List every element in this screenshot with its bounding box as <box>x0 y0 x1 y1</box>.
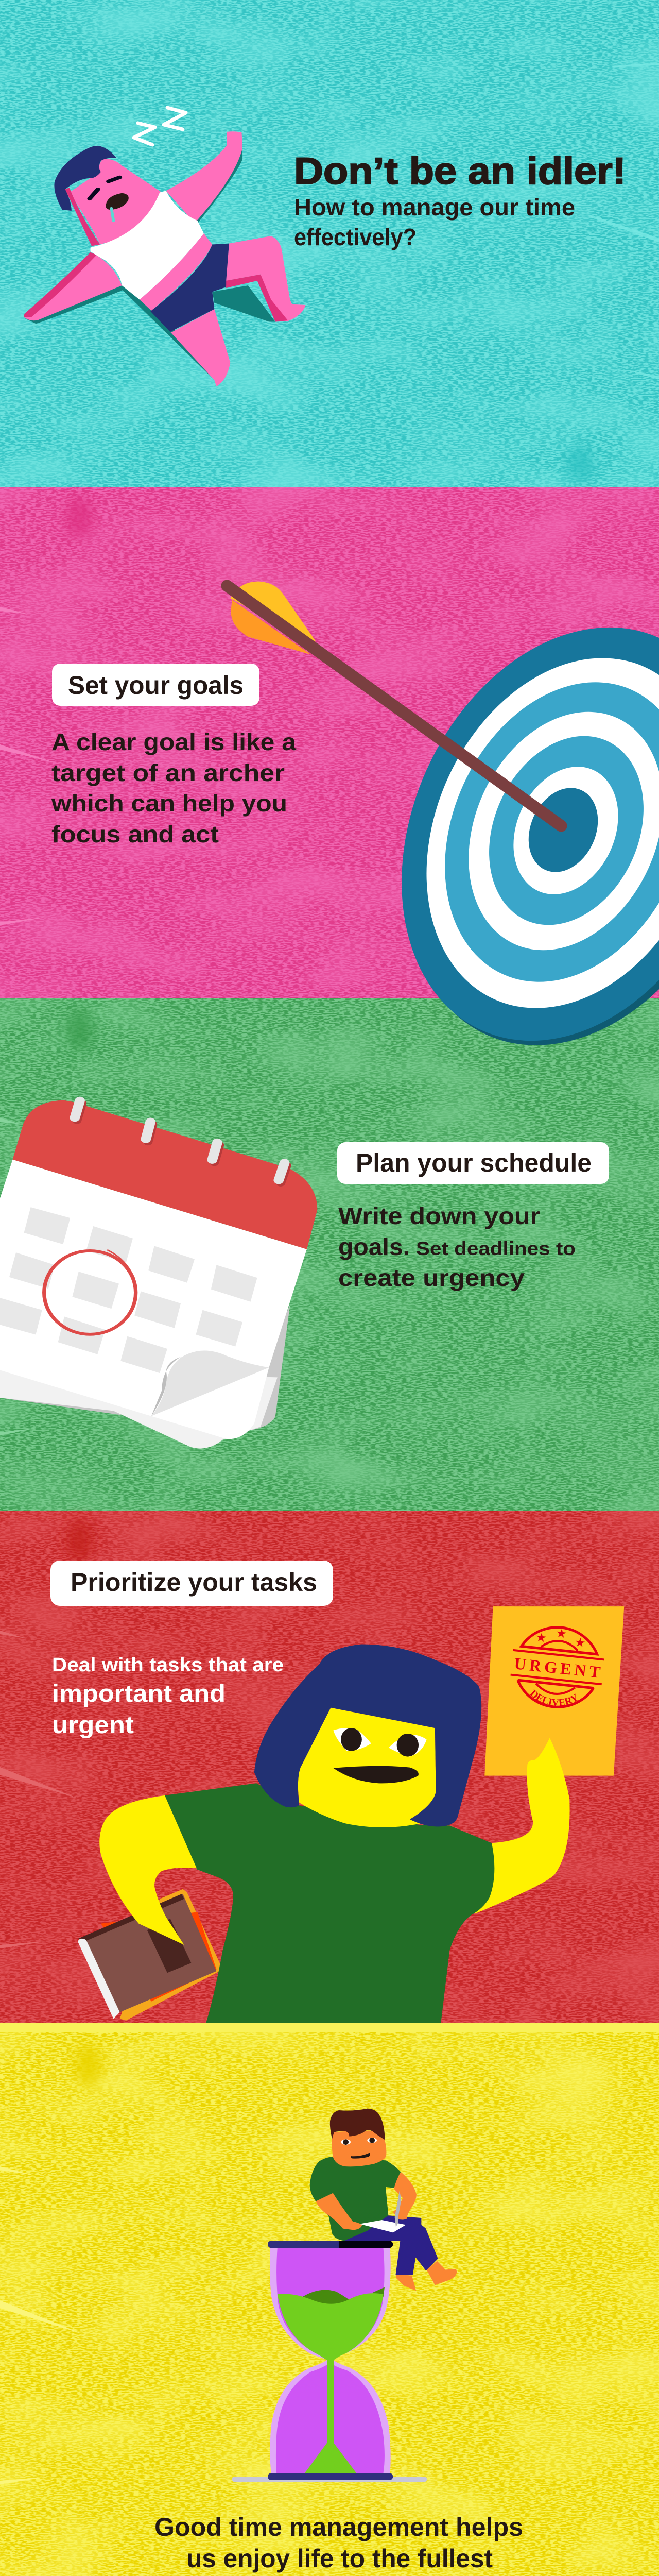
text: goals body: which can help you <box>51 790 287 817</box>
urgent paper <box>484 1606 624 1776</box>
illustration: sleeping man <box>24 108 305 386</box>
subtitle: How to manage our time <box>294 194 575 221</box>
illustration: calendar <box>0 1100 317 1449</box>
illustration: boy writing on hourglass <box>310 2109 457 2291</box>
text: plan body: goals. <box>338 1233 410 1260</box>
stamp: urgent delivery: ★ <box>574 1635 586 1650</box>
closing message <box>154 2513 523 2573</box>
panel: good time management <box>0 2023 659 2576</box>
closing message: us enjoy life to the fullest <box>186 2544 493 2573</box>
text: prioritize body: important and <box>52 1680 226 1707</box>
stamp: urgent delivery: URGENT <box>513 1654 601 1682</box>
books <box>78 1889 223 2021</box>
text: goals body: A clear goal is like a <box>51 728 296 755</box>
text: goals body: focus and act <box>51 821 219 848</box>
text: goals body <box>51 728 296 848</box>
heading: prioritize your tasks <box>50 1561 333 1606</box>
heading: plan your schedule: Plan your schedule <box>356 1148 592 1177</box>
heading: prioritize your tasks: Prioritize your tasks <box>71 1568 317 1597</box>
stamp: urgent delivery: DELIVERY <box>529 1689 578 1706</box>
closing message: Good time management helps <box>154 2513 523 2541</box>
text: plan body: Write down your <box>338 1202 540 1229</box>
text: prioritize body <box>52 1654 284 1738</box>
heading: set your goals <box>52 664 259 706</box>
panel: plan your schedule <box>0 998 659 1511</box>
illustration: arrow <box>227 582 561 826</box>
illustration: woman with books and urgent paper <box>78 1606 624 2023</box>
red circle <box>44 1250 136 1334</box>
panel: prioritize your tasks <box>0 1510 659 2023</box>
text: plan body: Set deadlines to <box>416 1238 576 1259</box>
subtitle <box>294 194 575 250</box>
illustration: hourglass <box>232 2241 427 2482</box>
panel: intro, sleeping idler <box>0 0 659 487</box>
heading: set your goals: Set your goals <box>68 671 244 700</box>
heading: plan your schedule <box>337 1142 609 1184</box>
text: prioritize body: urgent <box>52 1711 134 1738</box>
title: Don’t be an idler! <box>294 150 626 192</box>
panel: set your goals <box>0 487 659 1100</box>
illustration: target <box>337 573 659 1100</box>
text: plan body: create urgency <box>338 1264 525 1291</box>
stamp: urgent delivery: ★ <box>555 1625 568 1641</box>
text: goals body: target of an archer <box>51 759 285 786</box>
stamp: urgent delivery: ★ <box>535 1630 547 1645</box>
text: plan body <box>338 1202 576 1291</box>
subtitle: effectively? <box>294 224 417 250</box>
text: prioritize body: Deal with tasks that are <box>52 1654 284 1676</box>
stamp: urgent delivery <box>511 1625 604 1708</box>
